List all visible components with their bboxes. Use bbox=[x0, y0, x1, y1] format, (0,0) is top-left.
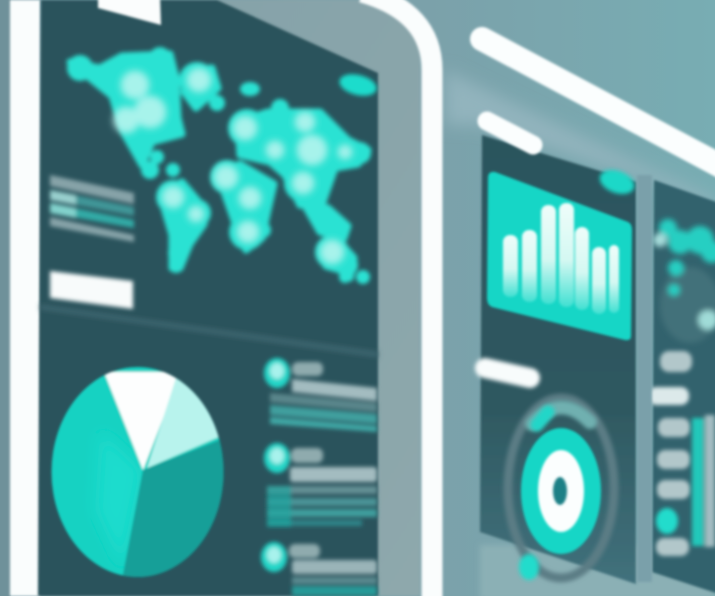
panel: main dark screen bbox=[38, 0, 378, 596]
legend block under map bbox=[50, 175, 134, 242]
section label bbox=[50, 271, 133, 309]
pie slice: soft highlight bbox=[95, 430, 143, 570]
gauge inner ring bbox=[521, 428, 601, 554]
radial gauge bbox=[508, 398, 614, 580]
map highlights bbox=[113, 68, 352, 264]
panel: middle dark screen bbox=[480, 135, 636, 584]
right map bbox=[653, 219, 715, 343]
panel: right dark screen bbox=[652, 180, 715, 596]
gauge heading pill bbox=[485, 368, 530, 378]
main screen frame bbox=[36, 0, 420, 596]
left strip bbox=[0, 0, 11, 596]
right text pills bbox=[648, 351, 692, 556]
pie chart bbox=[52, 367, 230, 590]
middle heading pill bbox=[487, 121, 533, 145]
gauge white ring bbox=[538, 450, 584, 532]
row 1 bbox=[264, 358, 377, 432]
row 3 bbox=[261, 542, 377, 596]
list rows beside pie bbox=[261, 358, 377, 596]
pie slice: pale bbox=[146, 378, 220, 470]
bars bbox=[503, 203, 619, 314]
pie slice: dark teal bbox=[122, 440, 224, 578]
map tag bbox=[337, 71, 379, 99]
gauge base dot bbox=[519, 554, 539, 580]
world map bbox=[67, 47, 371, 284]
long overhead light bar bbox=[482, 39, 715, 171]
middle tag bbox=[596, 166, 638, 198]
right status column bbox=[656, 415, 715, 547]
pie slice: white bbox=[104, 372, 176, 470]
map base bbox=[70, 54, 368, 278]
top label pill bbox=[98, 0, 161, 25]
gauge outer ring bbox=[508, 398, 614, 578]
white frame light strips bbox=[10, 0, 432, 596]
bar chart panel bbox=[487, 172, 632, 340]
gauge centre bbox=[553, 477, 567, 505]
row 2 bbox=[264, 443, 377, 527]
gap between screens bbox=[637, 175, 652, 582]
gauge ring highlight bbox=[532, 407, 590, 424]
